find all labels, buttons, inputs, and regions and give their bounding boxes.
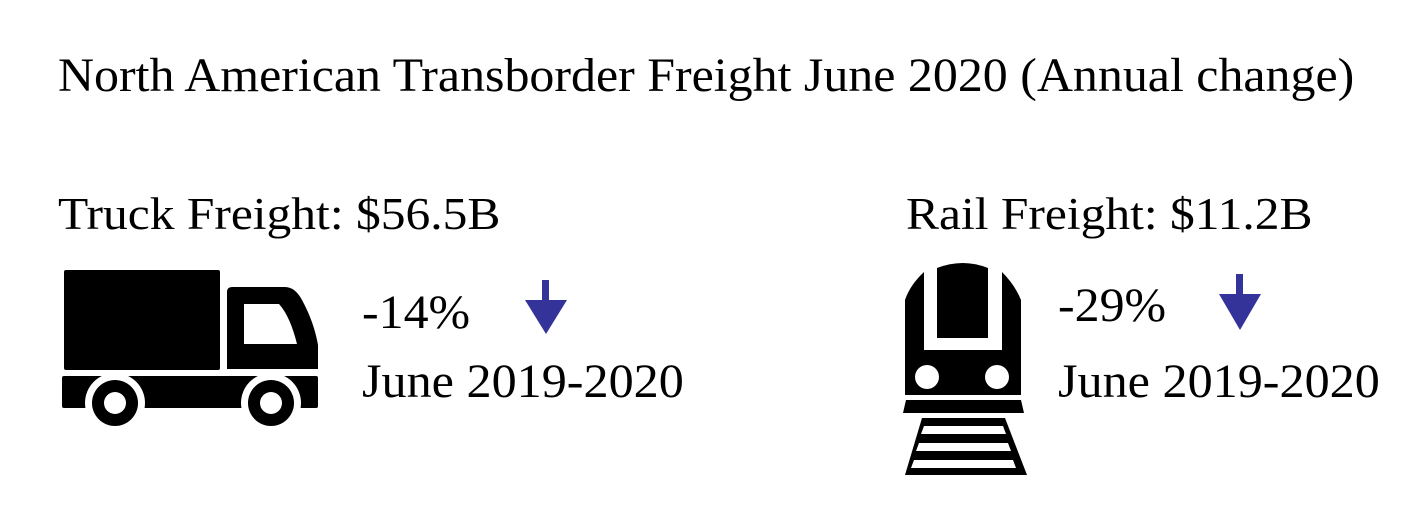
heading: rail freight: Rail Freight: $11.2B	[906, 189, 1313, 239]
heading: truck freight: Truck Freight: $56.5B	[58, 189, 500, 239]
arrow: rail down	[1219, 274, 1261, 330]
truck period: June 2019-2020	[362, 355, 684, 408]
arrow: truck down	[525, 280, 567, 334]
rail change value: -29%	[1058, 279, 1166, 332]
truck change value: -14%	[362, 286, 470, 339]
title: North American Transborder Freight June 2020 (Annual change)	[58, 49, 1354, 102]
icon: train	[903, 263, 1027, 475]
rail period: June 2019-2020	[1058, 355, 1380, 408]
icon: truck	[62, 270, 318, 433]
